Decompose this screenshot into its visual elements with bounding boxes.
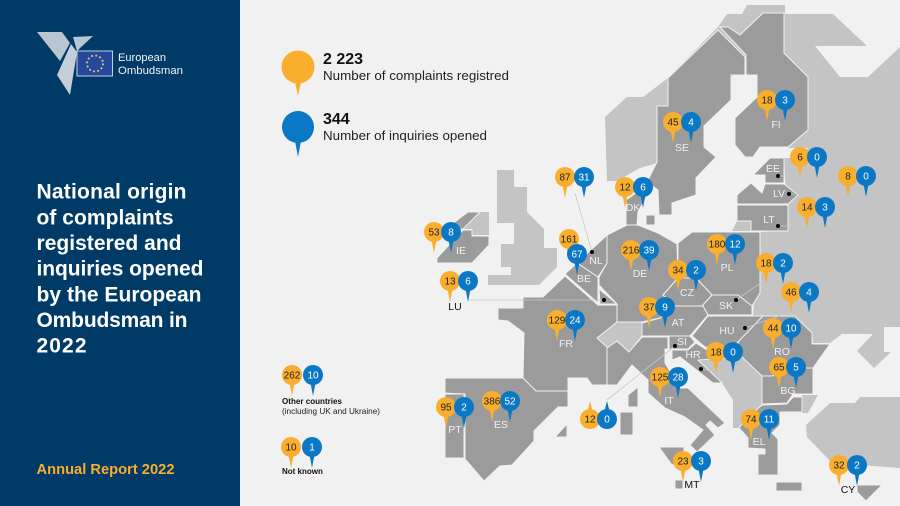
country: Malta	[675, 480, 683, 489]
pins: Luxembourg: LU	[448, 301, 462, 313]
pins: Greece	[741, 409, 779, 448]
pins: Malta: 3	[698, 456, 704, 468]
pins: Austria: 37	[643, 302, 655, 314]
pins: Italy	[650, 367, 688, 407]
legend: complaints	[282, 50, 509, 96]
pins: Germany: 39	[643, 246, 655, 256]
logo: European Ombudsman	[37, 32, 183, 95]
country: Croatia	[672, 343, 740, 383]
title: National origin	[36, 180, 186, 204]
legend: inquiries: Number of inquiries opened	[323, 129, 487, 143]
pins: Cyprus	[829, 455, 867, 496]
pins: France: FR	[559, 338, 573, 350]
title: 2022	[36, 334, 86, 358]
pins: Netherlands	[555, 167, 603, 267]
country: Denmark	[626, 190, 646, 225]
pins: Italy: 28	[672, 372, 684, 384]
pins: Estonia: 6	[797, 152, 803, 164]
country: Belgium	[565, 263, 598, 303]
pins: Ireland: 53	[428, 228, 440, 238]
pins: Austria	[639, 297, 685, 329]
pins: Slovenia	[580, 336, 687, 429]
legend: inquiries	[282, 111, 487, 157]
legend: other countries: 10	[307, 370, 319, 382]
pins: Slovenia: SI	[677, 336, 687, 348]
pins: Austria: AT	[672, 317, 685, 329]
pins: Estonia	[766, 147, 827, 178]
country: Corsica	[628, 387, 638, 407]
country: Italy	[607, 337, 725, 452]
pins: Sweden: 4	[688, 118, 694, 128]
pins: Ireland: IE	[456, 245, 466, 257]
country: Cyprus	[857, 485, 882, 501]
pins: Denmark: 12	[619, 182, 631, 194]
pins: Poland	[707, 234, 745, 274]
legend: other countries: 262	[284, 370, 301, 382]
pins: Italy: IT	[664, 395, 674, 407]
pins: Greece: 11	[764, 414, 775, 426]
country: Crete	[776, 482, 802, 491]
pins: Portugal: 95	[440, 402, 452, 414]
pins: Finland: 18	[761, 96, 773, 106]
country: Sardinia	[620, 412, 633, 435]
country: Germany	[599, 225, 678, 322]
legend: complaints: 2 223	[323, 51, 363, 68]
legend: inquiries: 344	[323, 111, 350, 128]
legend: not known: 10	[285, 442, 297, 454]
legend: not known: Not known	[282, 467, 323, 476]
pins: Latvia	[773, 166, 876, 200]
country: Ireland	[437, 230, 489, 263]
pins: Netherlands: 87	[559, 172, 571, 184]
country: Finland	[720, 13, 808, 157]
pins: Lithuania: 3	[822, 202, 828, 214]
country: Spain	[445, 378, 568, 481]
country: Romania	[738, 316, 830, 376]
pins: Poland: 180	[709, 240, 726, 250]
pins: Austria: 9	[662, 302, 668, 314]
pins: Hungary: 4	[806, 288, 812, 298]
country: Slovenia	[669, 336, 695, 349]
pins: Germany: 216	[623, 246, 640, 256]
country: Latvia	[737, 183, 798, 204]
pins: Slovakia: 18	[760, 258, 772, 270]
pins: Italy: 125	[652, 372, 669, 384]
country: Slovakia	[702, 295, 752, 315]
pins: Slovenia: 12	[584, 414, 596, 426]
pins: Finland: FI	[771, 119, 781, 131]
country: Czechia	[663, 278, 712, 306]
pins: Spain: 386	[484, 396, 501, 408]
pins: Malta	[673, 451, 711, 491]
pins: Lithuania	[763, 197, 835, 228]
legend: other countries: Other countries	[282, 397, 343, 406]
pins: Belgium: 67	[571, 250, 583, 260]
pins: Lithuania: 14	[801, 202, 813, 214]
map of Europe	[424, 5, 900, 501]
pins: Czechia: 2	[693, 266, 699, 276]
pins: Netherlands: NL	[589, 255, 603, 267]
non-member countries	[463, 5, 900, 468]
pins: Hungary: 46	[785, 288, 797, 298]
pins: Croatia	[685, 342, 743, 373]
pins: France: 24	[569, 316, 581, 326]
pins: Croatia: HR	[685, 349, 701, 361]
pins: Greece: 74	[745, 414, 757, 426]
pins: Malta: MT	[684, 479, 700, 491]
pins: Luxembourg: 13	[444, 276, 456, 288]
title: of complaints	[36, 206, 174, 230]
pins: Spain: ES	[494, 419, 508, 431]
pins: Ireland: 8	[448, 228, 454, 238]
pins: Denmark	[615, 177, 653, 214]
pins: Portugal: 2	[461, 402, 467, 414]
pins: Romania: 10	[785, 324, 797, 334]
title: by the European	[36, 284, 202, 306]
pins: Germany	[621, 240, 659, 280]
country: France	[498, 276, 617, 391]
pins: Belgium: 161	[561, 234, 578, 246]
country: Luxembourg	[599, 289, 617, 304]
country: Portugal	[445, 394, 464, 458]
pins: Cyprus: CY	[841, 484, 855, 496]
pins: Denmark: DK	[626, 202, 640, 214]
legend: other countries: (including UK and Ukraine)	[282, 407, 380, 416]
pins: Czechia: 34	[672, 266, 684, 276]
country: Donegal	[452, 212, 480, 229]
title: inquiries opened	[36, 258, 204, 280]
annual report label: Annual Report 2022	[36, 462, 174, 478]
pins: Ireland	[424, 222, 466, 257]
pins: Spain: 52	[504, 396, 516, 408]
pins: Croatia: 18	[710, 348, 722, 358]
pins: Finland	[757, 90, 795, 131]
country: Lithuania	[737, 205, 788, 231]
pins: Estonia: EE	[766, 163, 780, 175]
pins: Portugal: PT	[448, 424, 462, 436]
panel: left sidebar	[0, 0, 240, 506]
pins: Hungary	[719, 282, 819, 337]
pins: France	[547, 310, 585, 350]
pins: Sweden: 45	[667, 118, 679, 128]
pins: Finland: 3	[782, 96, 788, 106]
country: Greece	[739, 397, 802, 475]
pins: France: 129	[549, 316, 566, 326]
pins: Latvia: 0	[863, 172, 869, 182]
pins: Poland: PL	[721, 262, 734, 274]
pins: Bulgaria: BG	[780, 385, 796, 397]
country: Danish island	[646, 215, 655, 225]
title: Ombudsman in	[36, 309, 188, 332]
logo: European Ombudsman: European	[118, 52, 166, 64]
pins: Sweden	[663, 112, 701, 154]
pins: Estonia: 0	[814, 152, 820, 164]
pins: Portugal	[436, 397, 474, 436]
country: Sicily	[659, 447, 684, 465]
pins: Bulgaria: 5	[793, 362, 799, 374]
pins: Latvia: LV	[773, 188, 785, 200]
pins: Bulgaria: 65	[773, 362, 785, 374]
pins: Slovenia: 0	[604, 414, 610, 426]
legend: not known	[281, 437, 323, 476]
pins: Cyprus: 32	[833, 460, 845, 472]
pins: Netherlands: 31	[578, 172, 590, 184]
pins: Bulgaria	[769, 357, 806, 397]
country: Bulgaria	[762, 368, 813, 404]
country: Estonia	[753, 158, 784, 183]
pins: Greece: EL	[753, 436, 766, 448]
pins: Slovakia: SK	[719, 300, 733, 312]
pins: Czechia	[668, 260, 706, 299]
pins: Hungary: HU	[719, 325, 735, 337]
country: Hungary	[692, 316, 763, 350]
pins: Malta: 23	[677, 456, 689, 468]
legend: complaints: Number of complaints registred	[323, 69, 509, 83]
connector lines and dots	[468, 174, 866, 400]
pins: Cyprus: 2	[854, 460, 860, 472]
pins: Germany: DE	[633, 268, 647, 280]
country: Poland	[678, 232, 760, 306]
pins: Latvia: 8	[845, 172, 851, 182]
pins: Belgium: BE	[577, 273, 591, 285]
pins: Luxembourg: 6	[465, 276, 471, 288]
pins: Belgium	[559, 229, 591, 285]
logo: European Ombudsman: Ombudsman	[118, 65, 183, 77]
legend: not known: 1	[309, 442, 315, 454]
country: Sweden	[647, 30, 745, 215]
pins: Denmark: 6	[640, 182, 646, 194]
country: Austria	[642, 306, 708, 336]
pins: Romania: 44	[767, 324, 779, 334]
pins: Czechia: CZ	[680, 287, 695, 299]
pins: Luxembourg	[440, 271, 478, 313]
member states	[437, 13, 882, 501]
pins: Sweden: SE	[675, 142, 689, 154]
pins: Romania: RO	[774, 346, 790, 358]
pins: Slovakia: 2	[780, 258, 786, 270]
legend: other countries	[282, 365, 380, 416]
title: registered and	[36, 232, 182, 255]
pins: Spain	[482, 391, 520, 431]
pins: Romania	[763, 318, 801, 358]
pins: Croatia: 0	[730, 348, 736, 358]
country: Netherlands	[577, 235, 607, 277]
pins: Slovakia	[719, 253, 793, 312]
pins: Poland: 12	[729, 240, 741, 250]
pins: Lithuania: LT	[763, 214, 775, 226]
country: Balearic island	[555, 424, 567, 437]
